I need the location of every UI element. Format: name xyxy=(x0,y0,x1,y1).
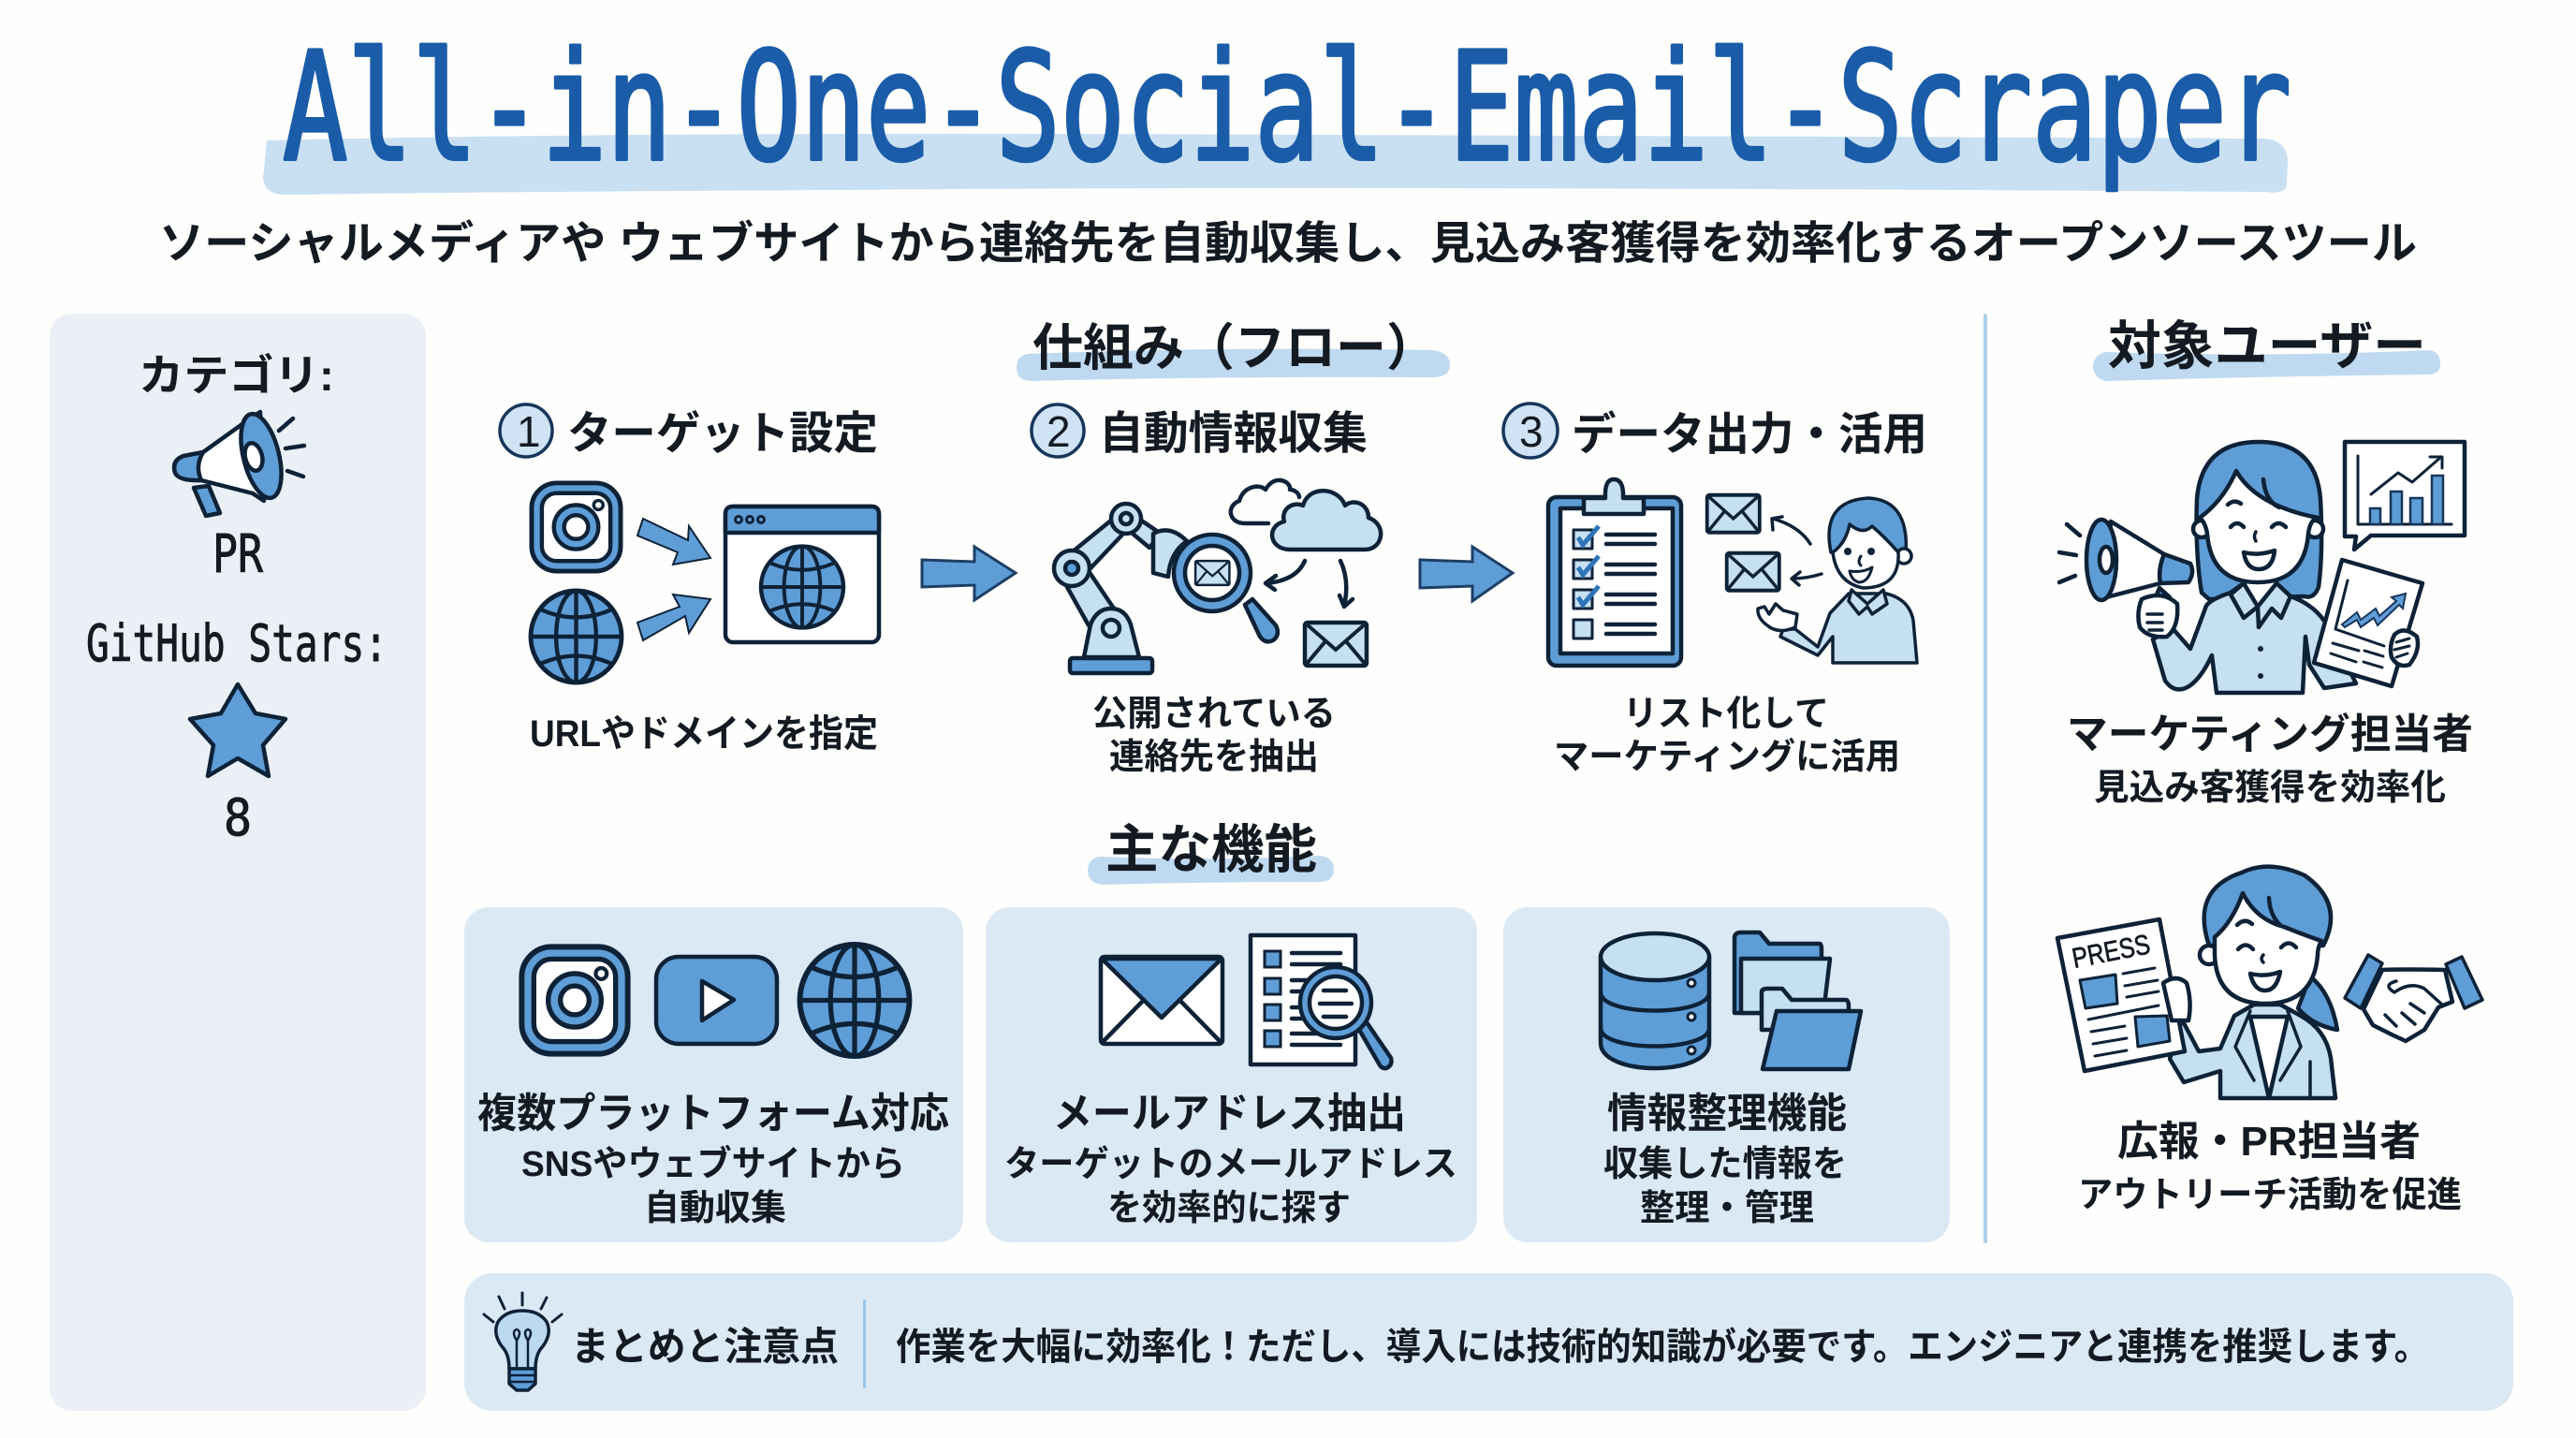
category value: PR xyxy=(212,524,263,585)
chart document xyxy=(2314,560,2422,686)
captions: step 2: 連絡先を抽出 xyxy=(1109,738,1319,777)
icon: robot arm with magnifier xyxy=(1054,504,1278,673)
step 2 heading: 自動情報収集 xyxy=(1099,409,1368,459)
captions: step 2: 公開されている xyxy=(1092,695,1336,734)
arrow: globe to browser xyxy=(637,594,710,640)
heading: users: 対象ユーザー xyxy=(2108,316,2426,375)
heading: users highlight xyxy=(2093,350,2440,381)
feature text: 収集した情報を xyxy=(1603,1145,1847,1184)
summary label: まとめと注意点 xyxy=(571,1325,839,1369)
icon: man presenting xyxy=(1758,498,1917,663)
arrows: person to envelopes xyxy=(1772,517,1822,585)
ponytail xyxy=(2298,976,2337,1030)
panel: feature multi-platform xyxy=(464,907,963,1242)
subtitle: ソーシャルメディアや ウェブサイトから連絡先を自動収集し、見込み客獲得を効率化するオープンソースツール xyxy=(159,219,2417,269)
heading: features highlight xyxy=(1088,856,1334,885)
icon: folders xyxy=(1734,932,1861,1069)
panel: metadata sidebar xyxy=(50,314,426,1411)
face xyxy=(2215,893,2321,1004)
arrow: instagram to browser xyxy=(637,519,710,565)
user text: marketing xyxy=(2067,712,2473,808)
hair back xyxy=(2197,442,2321,599)
user text: marketing: マーケティング担当者 xyxy=(2067,712,2473,757)
summary text: 作業を大幅に効率化！ただし、導入には技術的知識が必要です。エンジニアと連携を推奨します。 xyxy=(896,1327,2429,1368)
icon: PR woman: PRESS xyxy=(2070,929,2153,975)
icon: PR woman xyxy=(2057,867,2482,1098)
hand xyxy=(2163,978,2190,1020)
step 3 heading: 3 xyxy=(1519,407,1544,456)
feature title: 情報整理機能 xyxy=(1607,1091,1847,1137)
category label: カテゴリ: xyxy=(139,351,334,400)
feature text: ターゲットのメールアドレス xyxy=(1004,1145,1457,1184)
icon: clipboard xyxy=(1548,479,1681,666)
icon: envelope xyxy=(1101,957,1222,1044)
press release xyxy=(2057,919,2185,1071)
handshake xyxy=(2364,970,2452,1041)
arrows: cloud to magnifier and envelope xyxy=(1266,561,1353,607)
captions: step 3: マーケティングに活用 xyxy=(1554,738,1900,777)
captions: step 3: リスト化して xyxy=(1623,695,1829,734)
captions: step 2 xyxy=(1092,695,1336,777)
summary divider xyxy=(863,1299,866,1388)
panel: summary xyxy=(464,1273,2513,1411)
heading: flow: 仕組み（フロー） xyxy=(1032,320,1437,376)
icon: marketing woman xyxy=(2059,442,2465,693)
icon: megaphone xyxy=(174,410,304,516)
icon: globe xyxy=(531,591,622,682)
icon: clouds xyxy=(1231,480,1381,550)
icon: document search xyxy=(1251,935,1391,1068)
icon: instagram xyxy=(521,946,628,1054)
stars label: GitHub Stars: xyxy=(86,614,388,673)
panel: feature organising xyxy=(1503,907,1950,1242)
ear xyxy=(2200,946,2218,964)
icon: video play xyxy=(656,957,777,1044)
feature text: SNSやウェブサイトから xyxy=(521,1144,905,1184)
captions: step 3 xyxy=(1554,695,1900,777)
icon: instagram xyxy=(532,483,621,571)
panel: feature organising: 整理・管理 xyxy=(1640,1189,1814,1228)
vertical divider xyxy=(1983,314,1987,1243)
step 1 heading: ターゲット設定 xyxy=(567,409,878,459)
body xyxy=(2153,583,2356,693)
feature title: 複数プラットフォーム対応 xyxy=(477,1091,949,1137)
body xyxy=(2170,1005,2335,1098)
panel: feature email extraction xyxy=(986,907,1477,1242)
ears xyxy=(2193,521,2210,537)
panel: feature multi-platform: 自動収集 xyxy=(644,1189,786,1228)
arrow: step 2 to step 3 xyxy=(1420,547,1513,601)
face xyxy=(2200,471,2318,582)
fist xyxy=(2138,595,2177,637)
panel: feature email extraction: を効率的に探す xyxy=(1107,1189,1351,1228)
facial features xyxy=(2237,921,2296,949)
step 2 heading: 2 xyxy=(1046,407,1071,456)
heading: features: 主な機能 xyxy=(1105,820,1317,879)
feature title: メールアドレス抽出 xyxy=(1053,1091,1406,1137)
title highlight xyxy=(263,134,2288,195)
heading: flow highlight xyxy=(1017,349,1450,381)
icon: browser window xyxy=(725,506,879,642)
speech bubble chart xyxy=(2345,442,2465,550)
facial features xyxy=(2228,502,2286,527)
user text: PR xyxy=(2078,1119,2462,1215)
captions: step 1: URLやドメインを指定 xyxy=(530,713,878,755)
step 1 heading: 1 xyxy=(517,407,541,456)
hair xyxy=(2204,867,2331,946)
icon: globe xyxy=(799,945,910,1056)
user text: PR: アウトリーチ活動を促進 xyxy=(2078,1176,2462,1215)
icons: envelopes xyxy=(1707,495,1760,533)
user text: marketing: 見込み客獲得を効率化 xyxy=(2094,769,2446,808)
step 3 heading: データ出力・活用 xyxy=(1572,410,1927,460)
megaphone xyxy=(2155,588,2170,604)
icon: light bulb xyxy=(484,1293,562,1390)
stars value: 8 xyxy=(224,788,252,847)
icon: envelope xyxy=(1305,623,1367,666)
icon: database xyxy=(1601,933,1709,1068)
user text: PR: 広報・PR担当者 xyxy=(2117,1119,2421,1165)
icon: star xyxy=(190,684,285,776)
arrow: step 1 to step 2 xyxy=(922,547,1016,600)
